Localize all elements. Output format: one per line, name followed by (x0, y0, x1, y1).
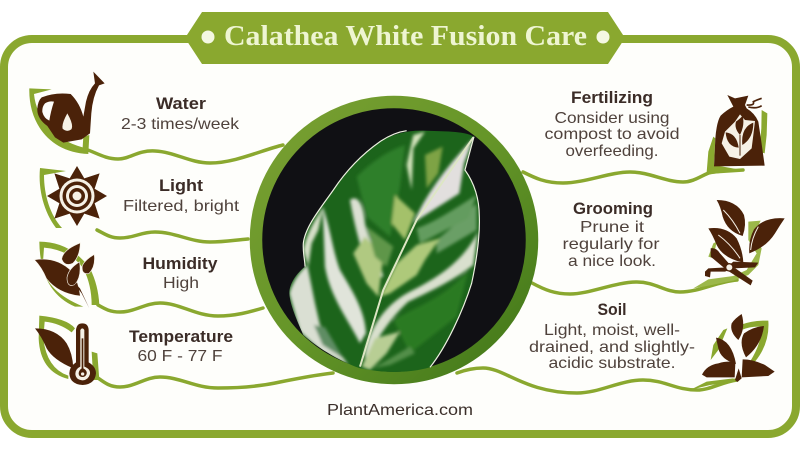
item: humidity: High (163, 275, 199, 292)
item: temperature (35, 316, 233, 385)
icon: leaf with drops (35, 242, 99, 308)
icon: leaves with pruning shears (693, 200, 785, 288)
website credit: PlantAmerica.com (327, 402, 473, 419)
item: grooming (562, 199, 785, 288)
temperature text: Temperature (129, 327, 233, 346)
item: fertilizing (544, 88, 767, 174)
item: fertilizing: Consider using (554, 110, 670, 127)
light text: Light (159, 176, 203, 195)
title: Calathea White Fusion Care (224, 21, 587, 52)
item: grooming: a nice look. (568, 253, 656, 270)
fertilizing text: Fertilizing (571, 88, 653, 107)
item: water (29, 72, 240, 154)
connector waves (85, 145, 743, 393)
icon: leaf with thermometer (35, 316, 99, 385)
soil text: Soil (598, 300, 626, 319)
item: grooming: regularly for (562, 236, 660, 253)
item: temperature: 60 F - 77 F (138, 348, 223, 365)
title banner (185, 12, 625, 64)
icon: sun (40, 166, 107, 228)
icon: compost bag (707, 95, 767, 174)
item: soil: Light, moist, well- (544, 322, 680, 339)
icon: seedling in soil (690, 314, 775, 390)
water text: Water (156, 94, 206, 113)
item: fertilizing: overfeeding. (566, 143, 658, 160)
item: light (40, 166, 240, 228)
item: soil: acidic substrate. (548, 355, 676, 372)
item: light: Filtered, bright (123, 198, 240, 215)
leaf (289, 131, 479, 372)
icon: watering can (29, 72, 105, 154)
item: soil: drained, and slightly- (529, 339, 695, 356)
item: grooming: Prune it (580, 219, 645, 236)
grooming text: Grooming (573, 199, 653, 218)
item: humidity (35, 242, 218, 308)
item: fertilizing: compost to avoid (544, 126, 680, 143)
item: water: 2-3 times/week (121, 116, 240, 133)
humidity text: Humidity (142, 254, 218, 273)
central plant image (256, 102, 532, 378)
item: soil (529, 300, 775, 390)
